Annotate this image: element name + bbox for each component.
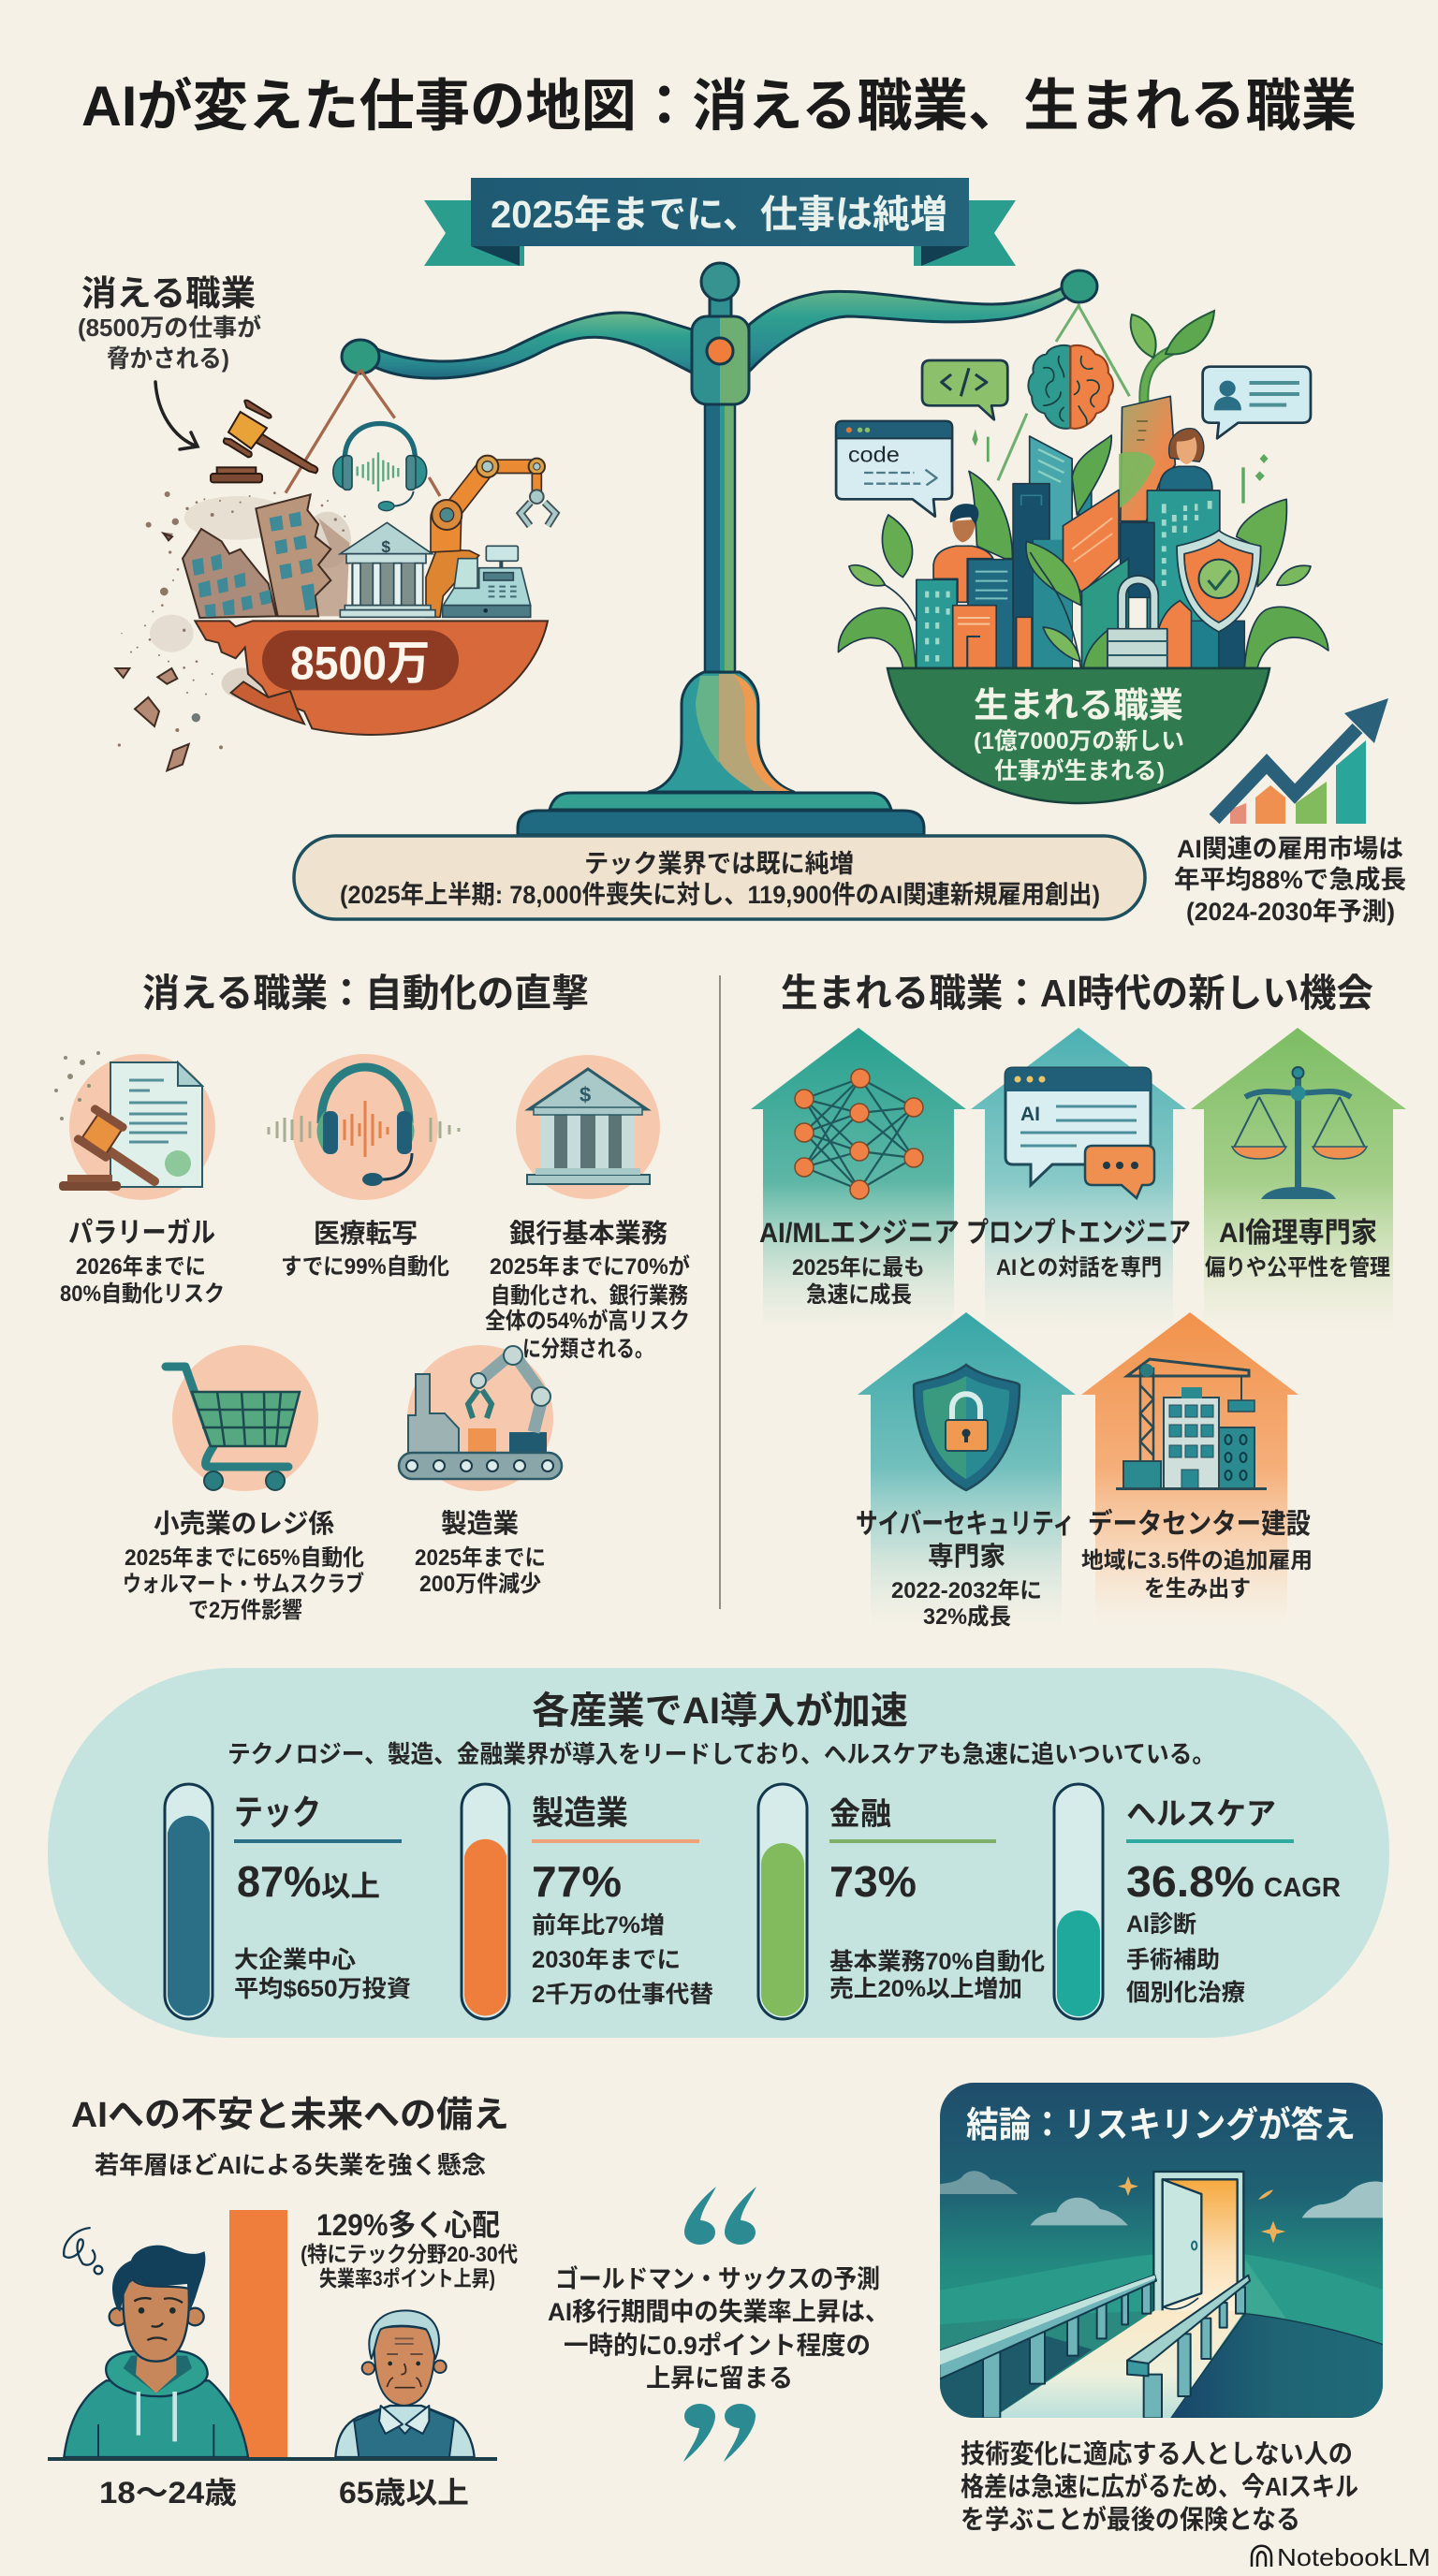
central leaves <box>1026 541 1108 667</box>
heading: emerging jobs: 生まれる職業：AI時代の新しい機会 <box>781 972 1373 1015</box>
manufacturing column: 前年比7%増 <box>532 1912 665 1939</box>
banner: 2025年までに、仕事は純増 <box>491 193 947 236</box>
item: bank basics: $ <box>580 1083 591 1106</box>
subheading: テクノロジー、製造、金融業界が導入をリードしており、ヘルスケアも急速に追いついている。 <box>227 1740 1215 1768</box>
market growth text <box>1174 835 1406 926</box>
body text <box>961 2439 1358 2534</box>
stat label: 失業率3ポイント上昇) <box>319 2266 495 2291</box>
body text: 格差は急速に広がるため、今AIスキル <box>961 2471 1358 2501</box>
panel: anxiety section <box>48 2096 518 2510</box>
manufacturing column: 2030年までに <box>532 1947 681 1973</box>
finance column <box>758 1784 1045 2019</box>
label: disappearing jobs <box>78 274 261 373</box>
bell <box>649 672 794 792</box>
pan label: 仕事が生まれる) <box>994 757 1165 784</box>
icon: person bubble <box>1203 367 1311 438</box>
icon: plant <box>1131 311 1214 402</box>
far hill <box>1170 2314 1384 2418</box>
title: AIが変えた仕事の地図：消える職業、生まれる職業 <box>81 75 1357 138</box>
item: cybersecurity: 32%成長 <box>923 1604 1011 1630</box>
badge: 8500万: 8500万 <box>290 637 430 689</box>
tech column: 以上 <box>321 1870 380 1903</box>
item: bank basics: 自動化され、銀行業務 <box>491 1283 688 1309</box>
scene: door and bridge <box>939 2083 1384 2418</box>
outer left leaves <box>838 499 1328 667</box>
icon: cash register <box>443 546 531 617</box>
tech column: テック <box>234 1793 321 1832</box>
manufacturing column: 77% <box>532 1857 622 1906</box>
item: AI/ML engineer <box>751 1028 966 1337</box>
item: bank basics: 全体の54%が高リスク <box>485 1308 690 1334</box>
man <box>933 504 993 602</box>
plants, buildings and icons <box>836 306 1328 667</box>
pan label: 生まれる職業 <box>974 686 1183 724</box>
icon: lock <box>1108 579 1192 667</box>
stat label <box>301 2208 518 2291</box>
finance column: 金融 <box>829 1796 891 1831</box>
right rail <box>1127 2276 1250 2418</box>
arrow <box>155 382 198 449</box>
item: cybersecurity: サイバーセキュリティ <box>856 1509 1075 1540</box>
building: small row <box>917 560 1032 667</box>
panel: disappearing job list <box>54 1051 690 1623</box>
age labels <box>99 2476 469 2510</box>
sparkles <box>972 429 1269 504</box>
item: manufacturing: 2025年までに <box>415 1545 546 1571</box>
finance column: 売上20%以上増加 <box>829 1976 1022 2002</box>
icon: bank: $ <box>381 537 390 556</box>
banner <box>424 178 1016 266</box>
healthcare column: 36.8% <box>1126 1857 1255 1906</box>
beam <box>374 286 1069 378</box>
clouds <box>940 2171 1384 2225</box>
icon: code window <box>836 421 952 517</box>
item: prompt engineer <box>966 1028 1191 1337</box>
left pan with declining jobs <box>115 370 555 770</box>
item: AI/ML engineer: AI/MLエンジニア <box>759 1218 960 1249</box>
quote text: ゴールドマン・サックスの予測 <box>555 2264 880 2293</box>
divider <box>719 975 721 1609</box>
tall document <box>1121 396 1175 521</box>
item: medical transcription: 医療転写 <box>314 1219 418 1248</box>
icon: gavel <box>211 401 317 482</box>
dust <box>118 491 351 749</box>
heading: 各産業でAI導入が加速 <box>532 1690 908 1732</box>
market growth text: 年平均88%で急成長 <box>1174 866 1406 894</box>
item: retail cashier: ウォルマート・サムスクラブ <box>123 1571 364 1597</box>
icon: robot arm <box>426 456 555 617</box>
growth chart icon <box>1214 698 1388 824</box>
label: disappearing jobs: (8500万の仕事が <box>78 314 261 342</box>
base <box>518 793 924 835</box>
panel: emerging job list <box>751 1028 1406 1630</box>
panel: AI adoption by industry <box>48 1668 1389 2038</box>
heading: disappearing jobs: 消える職業：自動化の直撃 <box>142 972 589 1015</box>
icon: opening quote <box>684 2187 756 2245</box>
age labels: 18〜24歳 <box>99 2476 237 2510</box>
icon: headphones <box>333 423 427 511</box>
item: paralegal: パラリーガル <box>68 1218 215 1249</box>
stat label: (特にテック分野20-30代 <box>301 2242 518 2266</box>
icon: code window: code <box>848 443 900 466</box>
callout: tech net growth: テック業界では既に純増 <box>584 850 854 878</box>
item: medical transcription: すでに99%自動化 <box>281 1254 449 1280</box>
age labels: 65歳以上 <box>339 2476 469 2510</box>
item: data center construction: を生み出す <box>1144 1576 1251 1602</box>
tech column: 87% <box>237 1857 321 1906</box>
healthcare column <box>1054 1784 1341 2019</box>
tech column: 大企業中心 <box>234 1947 356 1973</box>
item: retail cashier: 2025年までに65%自動化 <box>125 1545 364 1571</box>
right pan with growing jobs <box>836 304 1328 803</box>
label: disappearing jobs: 消える職業 <box>81 274 256 313</box>
building: teal tall <box>1030 436 1072 667</box>
item: bank basics <box>485 1055 690 1362</box>
subheading: 若年層ほどAIによる失業を強く懸念 <box>95 2151 486 2179</box>
pan label: (1億7000万の新しい <box>974 728 1184 754</box>
woman <box>1159 429 1212 490</box>
item: AI/ML engineer: 急速に成長 <box>806 1282 912 1308</box>
item: paralegal: 80%自動化リスク <box>60 1281 225 1307</box>
item: cybersecurity: 2022-2032年に <box>891 1578 1042 1603</box>
item: cybersecurity <box>856 1312 1076 1630</box>
item: data center construction <box>1081 1312 1313 1625</box>
finance column: 基本業務70%自動化 <box>829 1949 1045 1975</box>
heading: 結論：リスキリングが答え <box>966 2106 1356 2145</box>
pan <box>195 621 548 735</box>
badge: 8500万 <box>262 630 459 690</box>
icon: brain <box>1028 345 1113 429</box>
icon: ruined buildings <box>183 494 349 618</box>
quote text: AI移行期間中の失業率上昇は、 <box>548 2298 889 2326</box>
item: prompt engineer: AI <box>1020 1104 1040 1125</box>
manufacturing column <box>462 1784 713 2019</box>
item: retail cashier: 小売業のレジ係 <box>154 1509 334 1538</box>
pan label <box>974 686 1184 784</box>
building: dark <box>1013 484 1049 667</box>
item: data center construction: 地域に3.5件の追加雇用 <box>1081 1548 1313 1573</box>
manufacturing column: 製造業 <box>532 1795 628 1832</box>
finance column: 73% <box>829 1857 917 1906</box>
item: paralegal <box>54 1051 225 1307</box>
item: prompt engineer: プロンプトエンジニア <box>966 1218 1191 1249</box>
road <box>992 2310 1245 2418</box>
stat label: 129%多く心配 <box>316 2208 500 2242</box>
item: paralegal: 2026年までに <box>76 1254 206 1280</box>
healthcare column: AI診断 <box>1126 1911 1196 1938</box>
scale balance <box>342 263 1097 835</box>
item: medical transcription <box>269 1054 459 1280</box>
market growth text: AI関連の雇用市場は <box>1177 835 1403 863</box>
item: data center construction: データセンター建設 <box>1088 1508 1311 1540</box>
icon: code bubble <box>922 360 1007 419</box>
building: teal right <box>1147 490 1220 667</box>
icon: older person <box>335 2310 475 2457</box>
item: AI ethics specialist <box>1191 1028 1406 1337</box>
left rail <box>939 2276 1156 2418</box>
icon: worried young person <box>64 2228 248 2457</box>
tech column <box>165 1784 411 2019</box>
fragments <box>115 534 189 770</box>
callout: tech net growth <box>294 836 1145 919</box>
panel: Goldman Sachs quote <box>548 2187 889 2462</box>
item: manufacturing <box>399 1345 562 1597</box>
item: bank basics: 銀行基本業務 <box>509 1219 668 1248</box>
sparkles <box>1118 2176 1285 2244</box>
item: retail cashier: で2万件影響 <box>188 1598 302 1623</box>
door <box>1153 2172 1243 2312</box>
quote text <box>548 2264 889 2393</box>
icon: shield <box>1177 531 1261 667</box>
item: manufacturing: 製造業 <box>441 1509 519 1538</box>
heading: AIへの不安と未来への備え <box>71 2096 509 2135</box>
knobs and pivot <box>342 263 1097 404</box>
icon: bank <box>340 522 435 617</box>
market growth text: (2024-2030年予測) <box>1186 898 1395 926</box>
panel: conclusion <box>939 2083 1384 2534</box>
building: orange slant <box>1064 490 1119 593</box>
item: cybersecurity: 専門家 <box>928 1542 1005 1571</box>
item: AI/ML engineer: 2025年に最も <box>792 1255 925 1281</box>
quote text: 一時的に0.9ポイント程度の <box>564 2332 871 2360</box>
item: bank basics: 2025年までに70%が <box>490 1253 690 1280</box>
item: manufacturing: 200万件減少 <box>419 1572 541 1597</box>
icon: closing quote <box>683 2404 756 2462</box>
tech column: 平均$650万投資 <box>234 1976 411 2002</box>
quote text: 上昇に留まる <box>646 2364 793 2393</box>
manufacturing column: 2千万の仕事代替 <box>532 1982 713 2008</box>
left tall leaf <box>969 471 1012 559</box>
pan <box>888 668 1269 803</box>
callout: tech net growth: (2025年上半期: 78,000件喪失に対し、119,900件のAI関連新規雇用創出) <box>340 881 1100 909</box>
item: AI ethics specialist: AI倫理専門家 <box>1219 1218 1377 1249</box>
body text: を学ぶことが最後の保険となる <box>961 2504 1300 2534</box>
healthcare column: 手術補助 <box>1126 1947 1220 1973</box>
bar <box>229 2210 287 2458</box>
healthcare column: 個別化治療 <box>1126 1980 1245 2006</box>
label: disappearing jobs: 脅かされる) <box>107 344 229 373</box>
item: retail cashier <box>123 1345 364 1623</box>
notebooklm mark: NotebookLM <box>1277 2543 1431 2571</box>
healthcare column: ヘルスケア <box>1126 1796 1276 1831</box>
post <box>705 398 735 679</box>
item: prompt engineer: AIとの対話を専門 <box>996 1255 1162 1281</box>
body text: 技術変化に適応する人としない人の <box>961 2439 1353 2468</box>
item: bank basics: に分類される。 <box>522 1337 653 1362</box>
item: AI ethics specialist: 偏りや公平性を管理 <box>1205 1255 1390 1281</box>
healthcare column: CAGR <box>1264 1873 1341 1903</box>
